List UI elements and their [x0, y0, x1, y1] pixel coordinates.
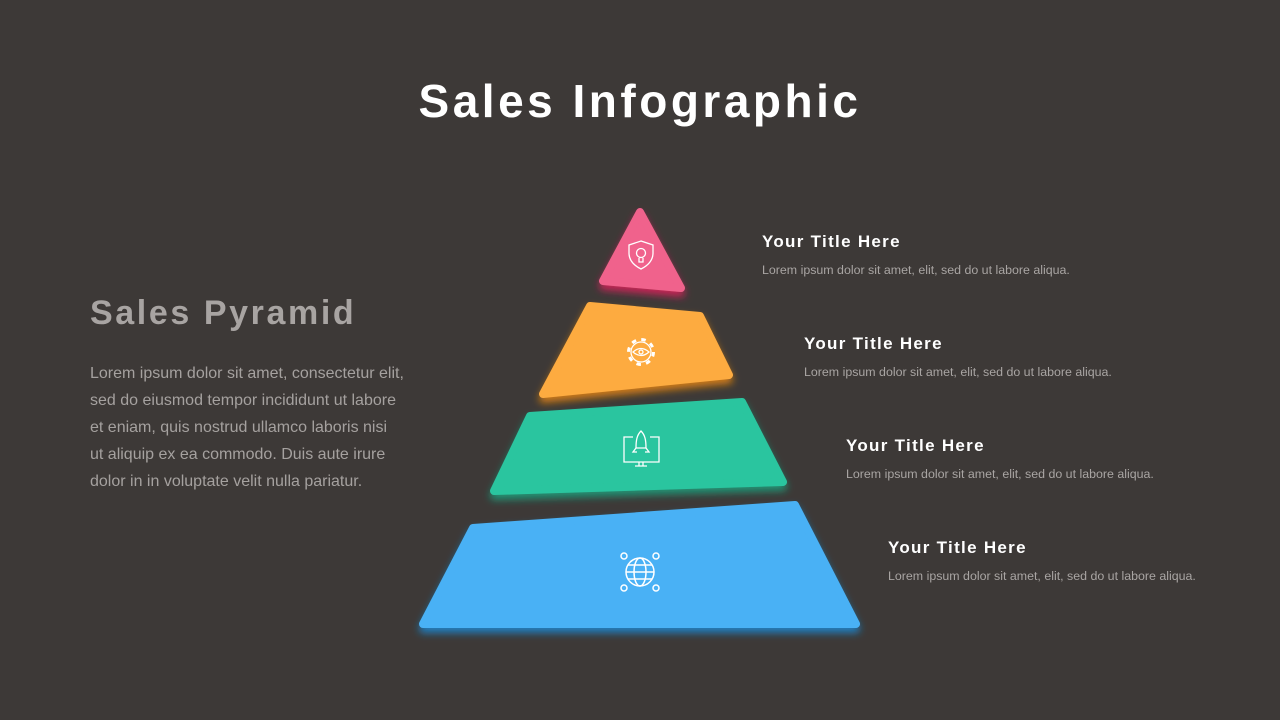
text: item 4: [888, 538, 1196, 583]
text block: description: dolor in in voluptate velit nulla pariatur.: [90, 473, 362, 490]
text block: description: ut aliquip ex ea commodo. Duis aute irure: [90, 446, 385, 463]
text block: description: Lorem ipsum dolor sit amet, consectetur elit,: [90, 365, 404, 382]
icon: gear eye: [628, 340, 654, 364]
text: item 2: Lorem ipsum dolor sit amet, elit, sed do ut labore aliqua.: [804, 365, 1112, 379]
icon: globe: [621, 553, 659, 591]
text: item 3: Your Title Here: [846, 436, 985, 455]
text block: description: sed do eiusmod tempor incididunt ut labore: [90, 392, 396, 409]
icon: shield bulb: [629, 241, 653, 269]
pyramid level 1 pink: [603, 212, 681, 288]
heading: sales pyramid: Sales Pyramid: [90, 294, 356, 332]
text: item 4: Your Title Here: [888, 538, 1027, 557]
text block: description: et eniam, quis nostrud ullamco laboris nisi: [90, 419, 387, 436]
text: item 2: Your Title Here: [804, 334, 943, 353]
text: item 3: [846, 436, 1154, 481]
text: item 4: Lorem ipsum dolor sit amet, elit, sed do ut labore aliqua.: [888, 569, 1196, 583]
pyramid level 3 green: [494, 402, 783, 491]
text: item 1: [762, 232, 1070, 277]
pyramid level 4 blue: [423, 505, 856, 624]
text: item 2: [804, 334, 1112, 379]
text: item 1: Lorem ipsum dolor sit amet, elit, sed do ut labore aliqua.: [762, 263, 1070, 277]
pyramid level 2 orange: [543, 306, 729, 394]
text: item 1: Your Title Here: [762, 232, 901, 251]
text: item 3: Lorem ipsum dolor sit amet, elit, sed do ut labore aliqua.: [846, 467, 1154, 481]
title: Sales Infographic: [419, 75, 861, 127]
text block: description: [90, 365, 404, 490]
icon: rocket monitor: [624, 431, 659, 466]
